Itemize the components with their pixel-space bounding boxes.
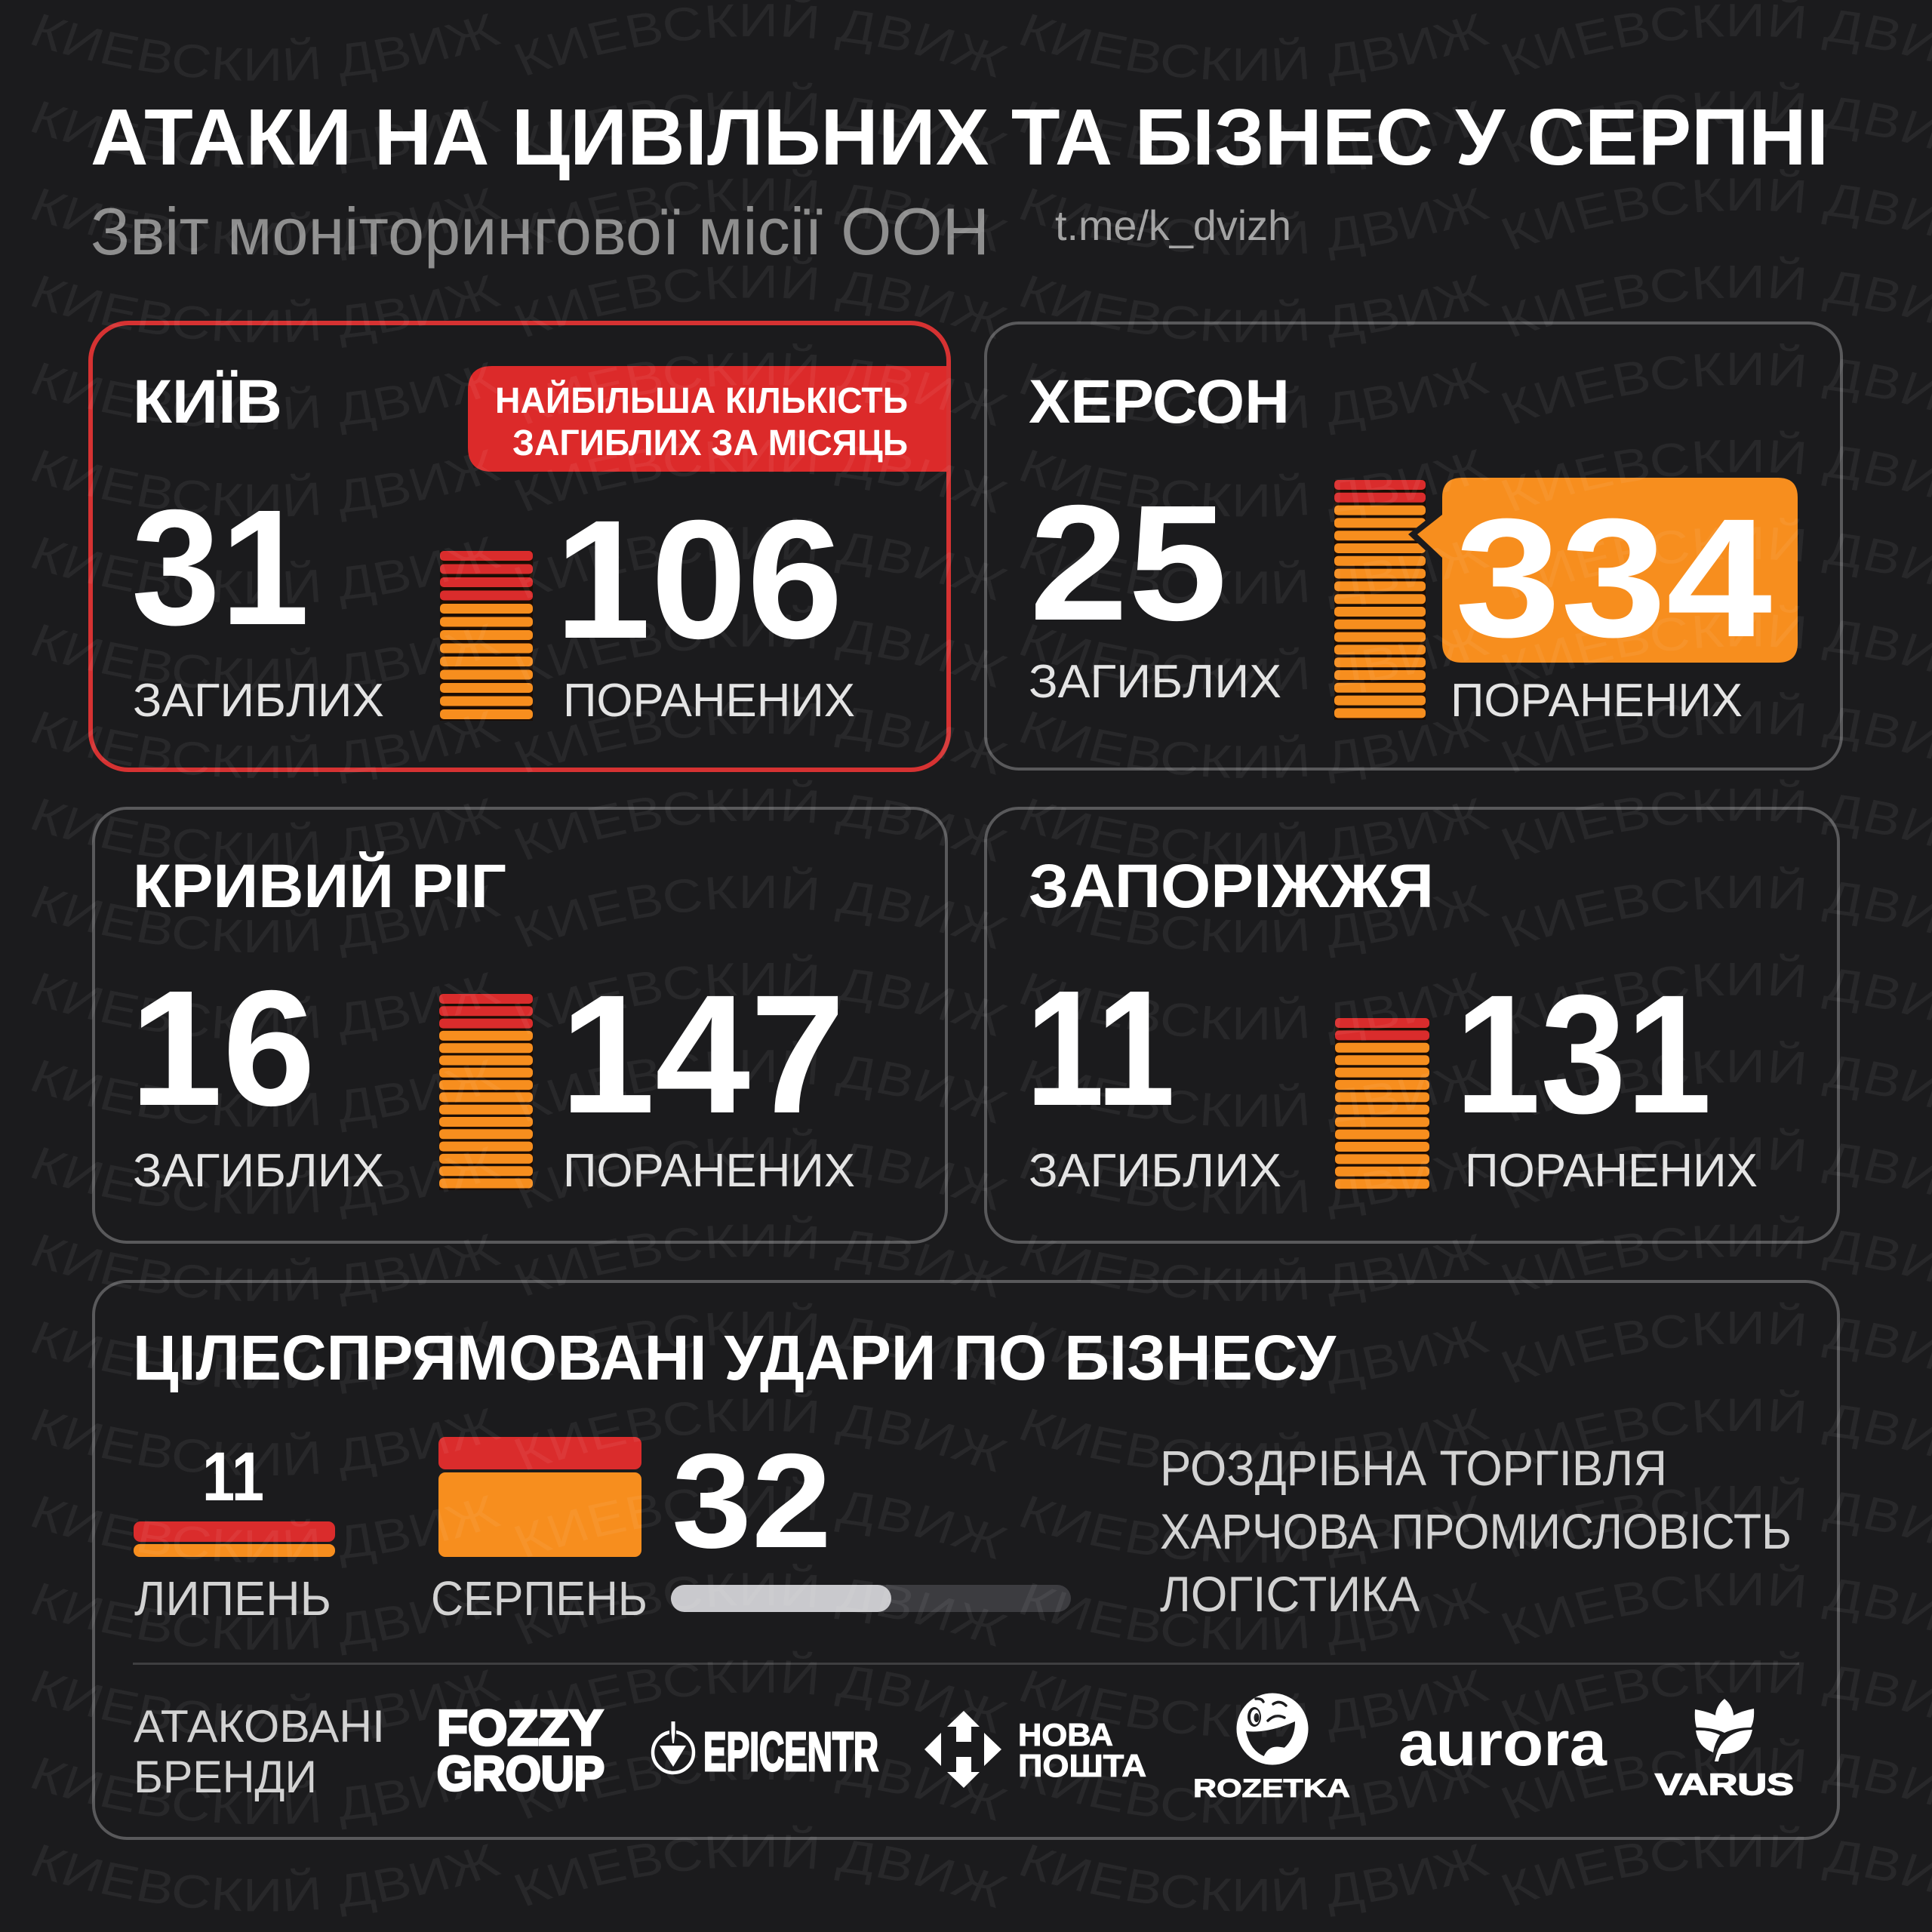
panel: Kyiv	[91, 323, 949, 770]
background watermark: repeated arched text: КИЕВСКИЙ ДВИЖ	[32, 798, 501, 871]
card border	[986, 323, 1841, 769]
background watermark: repeated arched text: КИЕВСКИЙ ДВИЖ	[1012, 1398, 1496, 1486]
background watermark: repeated arched text: КИЕВСКИЙ ДВИЖ	[23, 1312, 507, 1398]
background watermark: repeated arched text: КИЕВСКИЙ ДВИЖ	[1012, 1747, 1496, 1835]
title: АТАКИ НА ЦИВІЛЬНИХ ТА БІЗНЕС У СЕРПНІ	[91, 93, 1829, 182]
background watermark: repeated arched text: КИЕВСКИЙ ДВИЖ	[23, 1573, 507, 1660]
background watermark: repeated arched text: КИЕВСКИЙ ДВИЖ	[23, 1137, 507, 1224]
logo: Nova Poshta: ПОШТА	[1018, 1748, 1146, 1783]
background watermark: repeated arched text: КИЕВСКИЙ ДВИЖ	[32, 14, 501, 86]
badge: highest death toll: ЗАГИБЛИХ ЗА МІСЯЦЬ	[512, 423, 908, 463]
injured number: 147	[560, 960, 845, 1149]
logo: Nova Poshta	[924, 1711, 1146, 1788]
background watermark: repeated arched text: КИЕВСКИЙ ДВИЖ	[23, 1747, 507, 1835]
background watermark: repeated arched text: КИЕВСКИЙ ДВИЖ	[1012, 875, 1496, 963]
heading: КРИВИЙ РІГ	[133, 851, 506, 921]
killed number: 31	[131, 476, 309, 660]
background watermark: repeated arched text: КИЕВСКИЙ ДВИЖ	[1012, 1050, 1496, 1137]
logo: Epicentr	[653, 1721, 878, 1783]
logo: Rozetka: ROZETKA	[1193, 1774, 1350, 1803]
background watermark: repeated arched text: КИЕВСКИЙ ДВИЖ	[23, 1050, 507, 1137]
background watermark: repeated arched text: КИЕВСКИЙ ДВИЖ	[1020, 798, 1490, 871]
heading: КИЇВ	[133, 368, 282, 436]
card border	[986, 808, 1838, 1242]
panel: business strikes	[94, 1281, 1838, 1838]
background watermark: repeated arched text: КИЕВСКИЙ ДВИЖ	[32, 101, 501, 174]
background watermark: repeated arched text: КИЕВСКИЙ ДВИЖ	[1020, 537, 1490, 609]
attacked brands label	[134, 1701, 385, 1802]
background watermark: repeated arched text: КИЕВСКИЙ ДВИЖ	[32, 362, 497, 435]
logo: Rozetka	[1193, 1694, 1350, 1803]
July value: 11	[202, 1438, 264, 1515]
heading: ХЕРСОН	[1029, 368, 1290, 436]
killed number: 11	[1026, 957, 1175, 1140]
background watermark: repeated arched text: КИЕВСКИЙ ДВИЖ	[515, 430, 1008, 513]
injured label: ПОРАНЕНИХ	[1465, 1145, 1758, 1197]
background watermark: repeated arched text: КИЕВСКИЙ ДВИЖ	[506, 1562, 1015, 1657]
July bar	[134, 1521, 335, 1557]
background watermark: repeated arched text: КИЕВСКИЙ ДВИЖ	[506, 1301, 1015, 1395]
background watermark: repeated arched text: КИЕВСКИЙ ДВИЖ	[1012, 1660, 1496, 1747]
background watermark: repeated arched text: КИЕВСКИЙ ДВИЖ	[23, 963, 507, 1050]
background watermark: repeated arched text: КИЕВСКИЙ ДВИЖ	[1012, 1486, 1496, 1573]
background watermark: repeated arched text: КИЕВСКИЙ ДВИЖ	[515, 692, 1008, 774]
background watermark: repeated arched text: КИЕВСКИЙ ДВИЖ	[32, 711, 501, 783]
badge: highest death toll	[468, 366, 949, 472]
background watermark: repeated arched text: КИЕВСКИЙ ДВИЖ	[32, 450, 501, 522]
background watermark: repeated arched text: КИЕВСКИЙ ДВИЖ	[506, 1214, 1015, 1308]
sector list: РОЗДРІБНА ТОРГІВЛЯ	[1160, 1440, 1667, 1496]
card border	[94, 1281, 1838, 1838]
attacked brands label: БРЕНДИ	[134, 1752, 317, 1802]
July label: ЛИПЕНЬ	[134, 1571, 331, 1626]
background watermark: repeated arched text: КИЕВСКИЙ ДВИЖ	[518, 343, 1008, 426]
sector list	[1160, 1440, 1792, 1622]
callout: injured: 334	[1455, 484, 1772, 672]
killed label: ЗАГИБЛИХ	[133, 675, 384, 727]
background watermark: repeated arched text: КИЕВСКИЙ ДВИЖ	[1012, 1835, 1496, 1921]
background watermark: repeated arched text: КИЕВСКИЙ ДВИЖ	[1020, 450, 1490, 522]
background watermark: repeated arched text: КИЕВСКИЙ ДВИЖ	[1012, 1573, 1496, 1660]
background watermark: repeated arched text: КИЕВСКИЙ ДВИЖ	[1012, 1224, 1496, 1312]
logo: Nova Poshta: НОВА	[1018, 1717, 1113, 1752]
killed label: ЗАГИБЛИХ	[133, 1145, 384, 1197]
stacked bar	[440, 551, 533, 721]
background watermark: repeated arched text: КИЕВСКИЙ ДВИЖ	[32, 623, 501, 696]
background watermark: repeated arched text: КИЕВСКИЙ ДВИЖ	[515, 169, 1008, 252]
background watermark: repeated arched text: КИЕВСКИЙ ДВИЖ	[1020, 188, 1490, 260]
panel: Zaporizhzhia	[986, 808, 1838, 1242]
killed number: 16	[130, 957, 315, 1140]
stacked bar	[1334, 480, 1426, 720]
background watermark: repeated arched text: КИЕВСКИЙ ДВИЖ	[23, 1398, 507, 1486]
background watermark: repeated arched text: КИЕВСКИЙ ДВИЖ	[506, 1039, 1015, 1134]
background watermark: repeated arched text: КИЕВСКИЙ ДВИЖ	[32, 537, 501, 609]
card border	[91, 323, 949, 770]
background watermark: repeated arched text: КИЕВСКИЙ ДВИЖ	[506, 952, 1015, 1047]
killed label: ЗАГИБЛИХ	[1029, 1145, 1281, 1197]
background watermark: repeated arched text: КИЕВСКИЙ ДВИЖ	[515, 518, 1008, 601]
injured label: ПОРАНЕНИХ	[1451, 675, 1743, 727]
background watermark: repeated arched text: КИЕВСКИЙ ДВИЖ	[23, 1835, 507, 1921]
background watermark: repeated arched text: КИЕВСКИЙ ДВИЖ	[1012, 963, 1496, 1050]
attacked brands label: АТАКОВАНІ	[134, 1701, 385, 1752]
background watermark: repeated arched text: КИЕВСКИЙ ДВИЖ	[515, 605, 1008, 688]
background watermark: repeated arched text: КИЕВСКИЙ ДВИЖ	[506, 1737, 1015, 1831]
logo: Fozzy Group: FOZZY	[437, 1700, 603, 1755]
sector list: ХАРЧОВА ПРОМИСЛОВІСТЬ	[1160, 1503, 1792, 1559]
panel: Kherson	[986, 323, 1841, 769]
August bar	[438, 1437, 641, 1557]
panel: Kryvyi Rih	[94, 808, 946, 1242]
background watermark: repeated arched text: КИЕВСКИЙ ДВИЖ	[32, 275, 501, 347]
card border	[94, 808, 946, 1242]
heading: ЦІЛЕСПРЯМОВАНІ УДАРИ ПО БІЗНЕСУ	[133, 1322, 1337, 1393]
stacked bar	[439, 994, 533, 1190]
background watermark: repeated arched text: КИЕВСКИЙ ДВИЖ	[506, 1388, 1015, 1482]
background watermark: repeated arched text: КИЕВСКИЙ ДВИЖ	[515, 82, 1008, 165]
injured label: ПОРАНЕНИХ	[563, 1145, 855, 1197]
background watermark: repeated arched text: КИЕВСКИЙ ДВИЖ	[1020, 362, 1490, 435]
background watermark: repeated arched text: КИЕВСКИЙ ДВИЖ	[23, 1486, 507, 1573]
background watermark: repeated arched text: КИЕВСКИЙ ДВИЖ	[1020, 14, 1490, 86]
logo: Epicentr: EPICENTR	[703, 1722, 878, 1783]
background watermark: repeated arched text: КИЕВСКИЙ ДВИЖ	[1012, 1312, 1496, 1398]
background watermark: repeated arched text: КИЕВСКИЙ ДВИЖ	[23, 875, 507, 963]
badge: highest death toll: НАЙБІЛЬША КІЛЬКІСТЬ	[495, 380, 908, 421]
background watermark: repeated arched text: КИЕВСКИЙ ДВИЖ	[506, 1650, 1015, 1744]
logo: Fozzy Group	[437, 1700, 605, 1801]
background watermark: repeated arched text: КИЕВСКИЙ ДВИЖ	[1020, 625, 1490, 696]
killed label: ЗАГИБЛИХ	[1029, 656, 1281, 708]
logo: Aurora: aurora	[1398, 1708, 1607, 1779]
heading: ЗАПОРІЖЖЯ	[1029, 852, 1434, 921]
logo: Varus: VARUS	[1655, 1768, 1794, 1801]
subtitle: Звіт моніторингової місії ООН	[91, 194, 989, 269]
killed number: 25	[1029, 472, 1227, 655]
background watermark: repeated arched text: КИЕВСКИЙ ДВИЖ	[506, 1127, 1015, 1221]
injured label: ПОРАНЕНИХ	[563, 675, 855, 727]
progress bar	[671, 1585, 1071, 1612]
sector list: ЛОГІСТИКА	[1160, 1566, 1420, 1622]
background watermark: repeated arched text: КИЕВСКИЙ ДВИЖ	[1012, 1137, 1496, 1224]
background watermark: repeated arched text: КИЕВСКИЙ ДВИЖ	[506, 865, 1015, 959]
background watermark: repeated arched text: КИЕВСКИЙ ДВИЖ	[515, 257, 1008, 339]
injured number: 106	[555, 485, 843, 674]
background watermark: repeated arched text: КИЕВСКИЙ ДВИЖ	[515, 779, 1008, 862]
background watermark: repeated arched text: КИЕВСКИЙ ДВИЖ	[1020, 711, 1490, 783]
injured number: 131	[1455, 960, 1712, 1149]
logo: Fozzy Group: GROUP	[437, 1746, 605, 1801]
background watermark: repeated arched text: КИЕВСКИЙ ДВИЖ	[506, 1475, 1015, 1570]
background watermark: repeated arched text: КИЕВСКИЙ ДВИЖ	[1020, 101, 1486, 174]
background watermark: repeated arched text: КИЕВСКИЙ ДВИЖ	[506, 1824, 1015, 1918]
logo: Varus	[1655, 1699, 1794, 1801]
stacked bar	[1335, 1018, 1429, 1190]
August value: 32	[672, 1426, 832, 1576]
background watermark: repeated arched text: КИЕВСКИЙ ДВИЖ	[23, 1224, 507, 1312]
source link: t.me/k_dvizh	[1055, 202, 1291, 249]
August label: СЕРПЕНЬ	[431, 1571, 648, 1626]
background watermark: repeated arched text: КИЕВСКИЙ ДВИЖ	[32, 188, 501, 260]
background watermark: repeated arched text: КИЕВСКИЙ ДВИЖ	[1020, 275, 1490, 347]
background watermark: repeated arched text: КИЕВСКИЙ ДВИЖ	[23, 1660, 507, 1747]
